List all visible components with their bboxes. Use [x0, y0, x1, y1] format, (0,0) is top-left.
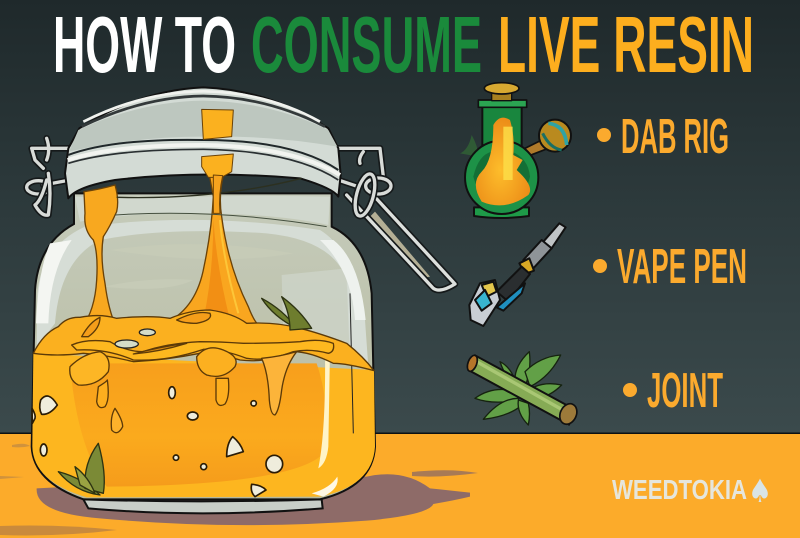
jar base: [83, 499, 323, 513]
glass reflection over liquid: [312, 293, 353, 497]
resin glints: [115, 329, 155, 348]
watermark logo: WEEDTOKIA: [612, 474, 747, 505]
illustration: jar of live resin: [27, 87, 470, 525]
sunken cannabis bud: [58, 443, 104, 495]
list item: dab rig: [597, 110, 729, 164]
right wire clamp: [337, 148, 391, 218]
list item: joint: [623, 364, 723, 418]
jar lid: [65, 87, 341, 227]
icon: dab rig: [460, 83, 571, 218]
left resin drip: [82, 185, 118, 328]
title: HOW TO: [53, 0, 236, 89]
title: [53, 0, 754, 89]
centre resin strand: [168, 175, 258, 325]
list item: vape pen: [593, 240, 747, 294]
glass jar body: [32, 193, 375, 499]
floating white chunks: [32, 387, 283, 497]
clamp lever: [347, 192, 455, 290]
table surface: [0, 432, 800, 538]
jar shadow: [37, 474, 470, 525]
left wire clamp: [27, 138, 70, 215]
liquid resin: [32, 353, 375, 497]
resin surface layer: [33, 310, 374, 433]
glass highlights: [36, 196, 368, 367]
icons column: [460, 83, 580, 427]
lid resin stripes: [202, 109, 233, 213]
darker resin centre: [70, 363, 326, 487]
floating cannabis bud: [262, 297, 312, 330]
icon: vape pen: [469, 223, 566, 326]
list item: joint: JOINT: [647, 364, 723, 418]
title: CONSUME: [251, 0, 482, 89]
watermark logo: ♠: [748, 472, 772, 510]
icon: joint with leaf: [465, 352, 580, 427]
